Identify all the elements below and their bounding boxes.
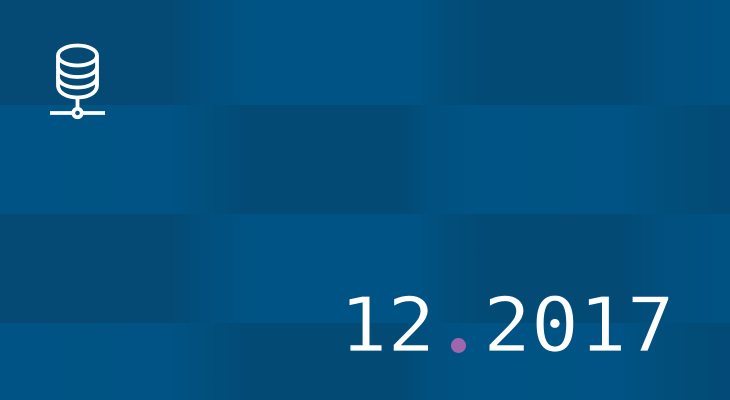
background band 1	[0, 0, 730, 105]
purple dot	[451, 338, 466, 352]
date label: 12.2017	[340, 282, 675, 369]
background band 3	[0, 214, 730, 323]
icon: database server	[50, 44, 105, 120]
background band 4	[0, 323, 730, 400]
background band 2	[0, 105, 730, 214]
